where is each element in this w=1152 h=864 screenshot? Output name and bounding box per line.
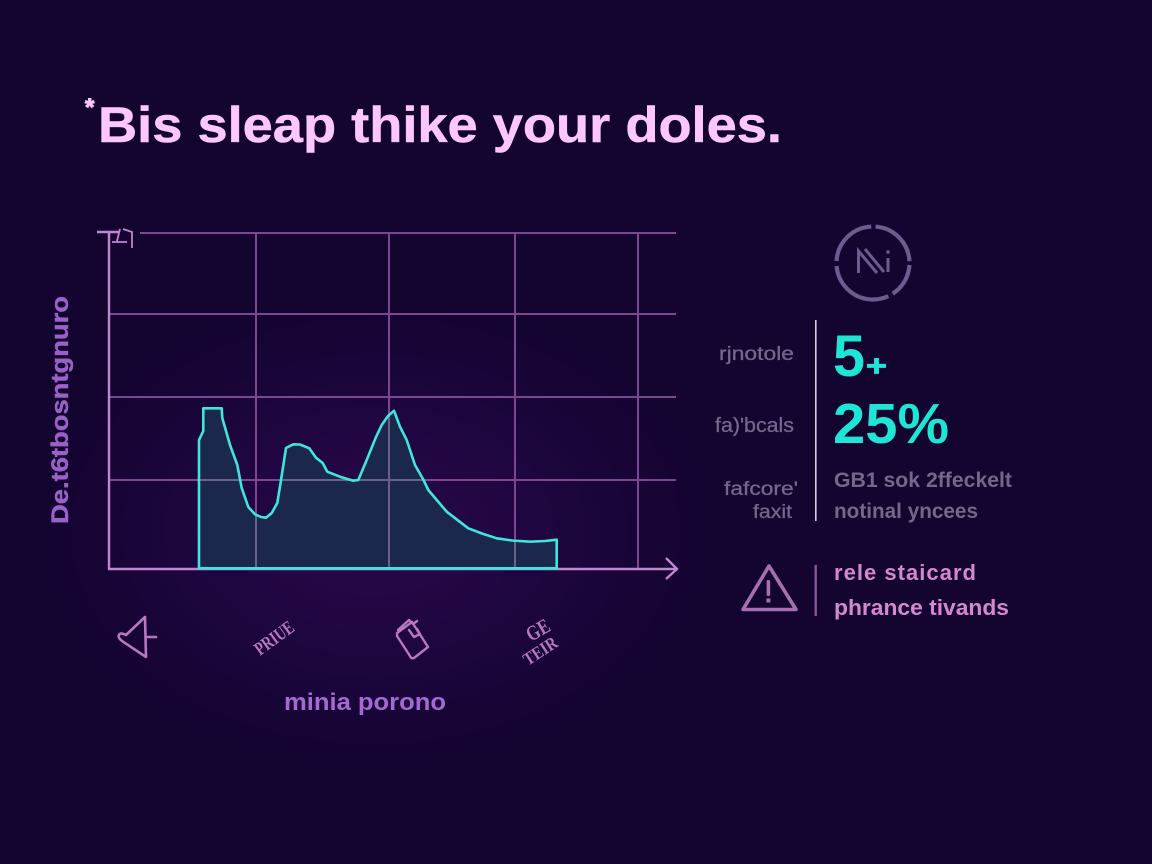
x-axis icon: speaker [119,617,156,657]
stats panel [715,320,1012,523]
grid seen through area [200,416,516,567]
title: * [85,94,95,121]
callout text: phrance tivands [834,595,1009,620]
x-axis label: tilted two-line text: TEIR [519,632,562,669]
title: Bis sleap thike your doles. [98,97,782,153]
area chart [97,229,677,579]
sleep curve line [199,408,557,568]
stat description [834,469,1012,523]
callout text: rele staicard [834,560,976,585]
stat value: 5+: 5 [833,324,865,389]
y-axis title: De.t6tbosntgnuro [47,296,74,524]
stat label: second: fa)'bcals [715,415,794,437]
x-axis label: tilted two-line text [519,614,562,669]
stat description: GB1 sok 2ffeckelt [834,469,1012,492]
x-axis icon: device [397,620,428,658]
stat label: third [724,479,798,523]
warning callout [743,560,1009,620]
icon: segmented circle logo [834,224,912,302]
icon: warning triangle [743,566,796,610]
x-axis label: tilted text: PRIUE [251,617,299,660]
stat value: 25%: 25% [833,392,949,456]
x-axis label: tilted two-line text: GE [522,614,554,646]
stat label: third: fafcore' [724,479,798,500]
chart grid [110,233,676,568]
stat value: 5+: + [866,350,887,383]
stat label: first: rjnotole [719,344,794,365]
callout text [834,560,1009,620]
callout divider [814,565,817,616]
stats divider [815,320,817,521]
stat label: third: faxit [753,502,793,523]
sleep curve area [199,408,557,568]
stat description: notinal yncees [834,500,978,523]
chart axes [97,229,677,579]
x-axis title: minia porono [284,689,446,716]
stat value: 5+ [833,324,887,389]
